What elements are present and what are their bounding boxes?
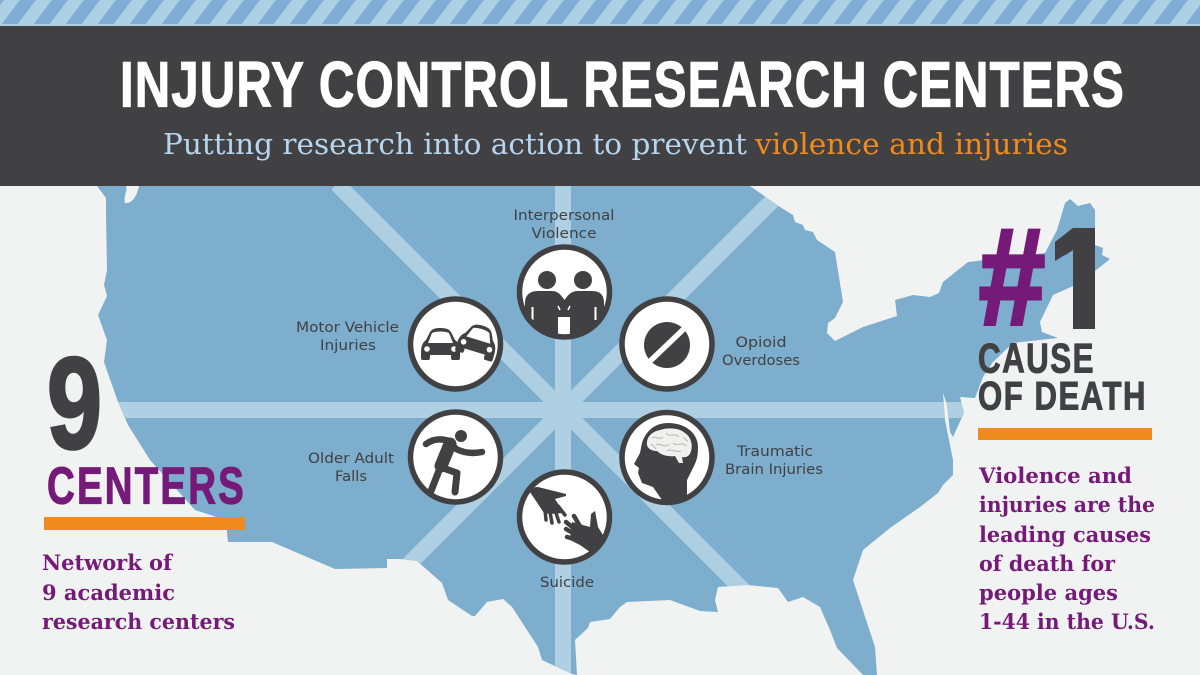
big hash: # — [979, 201, 1045, 354]
of death heading: OF DEATH — [978, 374, 1147, 418]
map: United States with radiating spokes — [90, 183, 1120, 675]
label: suicide: Suicide — [540, 575, 594, 591]
big number 9: 9 — [47, 330, 102, 476]
cause description: injuries are the — [979, 492, 1155, 517]
label: interpersonal violence: Violence — [532, 226, 596, 242]
cause description: leading causes — [979, 522, 1151, 547]
centers description: Network of — [42, 550, 174, 575]
icon: interpersonal violence — [520, 247, 610, 345]
cause description — [978, 463, 1155, 634]
subtitle highlight: violence and injuries — [754, 127, 1068, 161]
cause description: people ages — [979, 580, 1118, 605]
label: older adult falls: Older Adult — [308, 451, 395, 467]
orange divider — [978, 428, 1152, 440]
label: older adult falls — [308, 451, 395, 485]
cause heading: CAUSE — [978, 334, 1095, 382]
subtitle: Putting research into action to prevent — [163, 127, 747, 161]
cause description: of death for — [979, 551, 1116, 576]
centers description: 9 academic — [42, 580, 175, 605]
label: motor vehicle injuries — [296, 320, 399, 354]
label: motor vehicle injuries: Injuries — [320, 338, 376, 354]
cause description: 1-44 in the U.S. — [979, 609, 1155, 634]
label: traumatic brain injuries: Brain Injuries — [725, 462, 823, 478]
icon: motor vehicle injuries — [410, 299, 501, 389]
centers description — [42, 550, 235, 634]
label: interpersonal violence: Interpersonal — [514, 208, 614, 224]
panel: number 1 cause of death — [978, 197, 1155, 634]
icon: older adult falling figure — [410, 412, 500, 502]
icon: traumatic brain injury head — [622, 412, 712, 510]
centers heading: CENTERS — [47, 458, 246, 516]
label: opioid overdoses: Opioid — [736, 335, 786, 351]
icon: suicide reaching hands — [520, 472, 610, 562]
label: traumatic brain injuries: Traumatic — [736, 444, 813, 460]
label: traumatic brain injuries — [725, 444, 823, 478]
panel: 9 centers — [42, 330, 246, 634]
top striped band — [0, 0, 1200, 26]
label: interpersonal violence — [514, 208, 614, 242]
centers description: research centers — [42, 609, 235, 634]
big number 1: 1 — [1036, 197, 1118, 361]
header banner — [0, 26, 1200, 186]
icon: opioid pill — [622, 299, 712, 389]
cause description: Violence and — [978, 463, 1132, 488]
label: opioid overdoses: Overdoses — [722, 353, 800, 369]
orange divider — [44, 517, 245, 530]
label: motor vehicle injuries: Motor Vehicle — [296, 320, 399, 336]
label: opioid overdoses — [722, 335, 800, 369]
label: older adult falls: Falls — [335, 469, 367, 485]
